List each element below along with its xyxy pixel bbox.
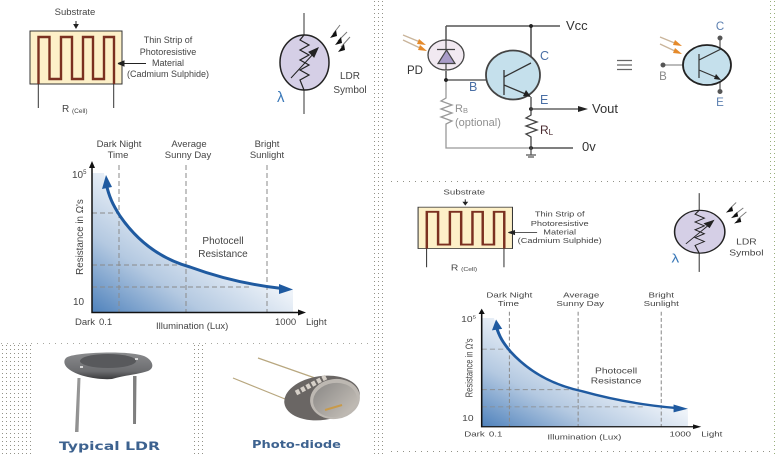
label: photoresistive material: Photoresistive — [531, 220, 589, 228]
LDR serpentine surface — [80, 354, 136, 368]
curve label: Resistance — [198, 249, 248, 260]
equivalence sign — [617, 60, 632, 70]
lambda: λ — [672, 252, 679, 265]
cell leads — [427, 249, 504, 267]
x axis labels: Dark — [464, 430, 486, 438]
x axis labels: Dark — [75, 317, 95, 328]
top condition labels: Average — [171, 139, 207, 150]
reference grid lines — [92, 165, 267, 312]
resistance curve — [106, 183, 282, 288]
symbol lead — [303, 13, 305, 114]
label: photoresistive material: Material — [152, 58, 184, 68]
label: photo-diode: Photo-diode — [252, 438, 341, 451]
photodiode body — [428, 40, 464, 70]
substrate diagram — [418, 188, 602, 273]
photodiode — [428, 39, 464, 70]
label: LDR symbol: Symbol — [729, 249, 763, 257]
arrow: Vout — [578, 106, 588, 112]
base lead — [664, 64, 699, 66]
label: cell resistance: (Cell) — [461, 268, 477, 273]
terminal labels: E — [716, 97, 724, 109]
photoresistive strip — [427, 212, 504, 249]
label: substrate: Substrate — [55, 7, 95, 18]
label: photoresistive material: Thin Strip of — [144, 35, 193, 45]
y axis title: Resistance in Ω's — [463, 338, 475, 397]
symbol arrowhead — [714, 74, 721, 80]
y axis ticks: 10 — [72, 170, 84, 181]
resistance curve — [496, 326, 677, 408]
junction dots — [444, 24, 533, 150]
label: PD: PD — [407, 65, 423, 77]
terminal labels: C — [716, 21, 724, 33]
top condition labels: Bright — [649, 291, 675, 299]
top condition labels: Time — [498, 299, 519, 308]
terminal dots — [661, 36, 723, 94]
symbol resistor — [695, 210, 704, 253]
light arrow heads — [726, 206, 741, 224]
substrate diagram — [30, 7, 209, 115]
LDR head — [64, 353, 152, 379]
diode triangle — [437, 39, 455, 70]
light arrow heads — [330, 30, 345, 52]
y axis title: Resistance in Ω's — [75, 199, 86, 275]
label: cell resistance: R — [62, 104, 69, 115]
top condition labels: Bright — [255, 139, 280, 150]
label: photoresistive material: Photoresistive — [140, 47, 196, 57]
symbol lead — [698, 193, 700, 272]
supply and output labels: 0v — [582, 139, 596, 154]
transistor — [486, 50, 540, 100]
label: RB: (optional) — [455, 117, 501, 129]
panel: LDR construction and response (top left) — [30, 7, 367, 332]
output and load — [526, 97, 579, 148]
chart: resistance vs illumination — [461, 291, 723, 441]
substrate rectangle — [418, 207, 512, 249]
curve label: Resistance — [591, 377, 641, 385]
x axis labels: 1000 — [669, 430, 691, 438]
label: RL: L — [549, 128, 554, 137]
panel: phototransistor circuit — [403, 18, 731, 157]
light arrows — [729, 202, 746, 220]
light arrows — [333, 25, 350, 47]
gradient area under curve — [482, 318, 688, 426]
photo: photo-diode — [233, 358, 363, 451]
light arrows — [660, 37, 677, 52]
base label: B — [659, 71, 667, 83]
base wire — [446, 79, 505, 81]
label: substrate: Substrate — [443, 188, 485, 196]
diode chip — [325, 405, 342, 410]
base resistor branch — [441, 80, 531, 148]
y axis ticks: 10 — [461, 315, 473, 324]
curve label: Photocell — [595, 366, 637, 375]
axes — [482, 312, 697, 427]
diode casing — [281, 371, 363, 425]
axis arrowheads — [479, 309, 701, 429]
top condition labels: Sunlight — [250, 150, 285, 161]
variable arrow — [686, 220, 714, 244]
top condition labels: Sunlight — [644, 299, 679, 308]
panel: component photos — [59, 353, 363, 453]
lambda: λ — [277, 89, 285, 106]
label: RB: B — [463, 106, 468, 115]
light arrow heads — [417, 39, 427, 51]
LDR symbol — [672, 193, 763, 272]
x axis labels: 0.1 — [489, 430, 503, 438]
diode leads — [233, 358, 315, 401]
emitter arrowhead — [523, 90, 531, 97]
chart: resistance vs illumination — [72, 139, 327, 332]
supply and output labels: Vcc — [566, 18, 588, 33]
LDR legs — [75, 376, 136, 432]
supply rail — [446, 25, 560, 27]
label: cell resistance: (Cell) — [72, 108, 88, 115]
axes — [92, 166, 302, 312]
circuit labels: B — [469, 80, 477, 94]
reference grid lines — [482, 312, 661, 426]
y axis ticks: 10 — [73, 297, 85, 308]
label: RL: R — [540, 123, 549, 137]
symbol resistor — [300, 35, 309, 90]
arrow: substrate pointer — [463, 199, 467, 205]
ground symbol — [526, 148, 536, 157]
x axis labels: Light — [306, 317, 327, 328]
x axis labels: 1000 — [275, 317, 296, 328]
top condition labels: Dark Night — [486, 291, 533, 299]
top condition labels: Average — [563, 291, 599, 299]
x axis labels: Illumination (Lux) — [547, 433, 622, 441]
symbol leads — [699, 49, 721, 78]
transistor body — [486, 50, 540, 100]
y axis ticks: 5 — [473, 315, 476, 320]
label: photoresistive material: (Cadmium Sulphide) — [518, 237, 602, 245]
arrow: substrate pointer — [74, 21, 78, 28]
panel: LDR construction and response (lower right copy) — [418, 188, 763, 441]
label: LDR symbol: LDR — [340, 71, 360, 82]
x axis labels: 0.1 — [99, 317, 112, 328]
diode lens rim — [307, 376, 363, 422]
top condition labels: Time — [108, 150, 128, 161]
LDR highlights — [80, 359, 138, 367]
LDR symbol — [277, 13, 367, 114]
diode rim markings — [296, 377, 326, 393]
symbol body — [280, 35, 329, 90]
light arrow heads — [673, 40, 682, 54]
label: cell resistance: R — [451, 264, 458, 272]
equivalent transistor symbol — [659, 21, 731, 109]
transistor leads — [504, 63, 531, 95]
label: photoresistive material: Thin Strip of — [535, 211, 585, 218]
label: typical LDR: Typical LDR — [59, 439, 160, 453]
curve label: Photocell — [202, 236, 244, 247]
arrow: material pointer — [508, 231, 537, 234]
supply and output labels: Vout — [592, 101, 618, 116]
circuit labels: C — [540, 49, 549, 63]
photo: typical LDR — [59, 353, 160, 453]
circuit labels: E — [540, 93, 548, 107]
label: LDR symbol: LDR — [736, 238, 757, 246]
gradient area under curve — [92, 173, 293, 312]
top condition labels: Dark Night — [97, 139, 142, 150]
substrate rectangle — [30, 31, 122, 84]
symbol body — [683, 45, 731, 85]
curve arrowheads — [102, 175, 293, 294]
light arrows — [403, 35, 420, 48]
cell leads — [38, 84, 114, 108]
collector and emitter terminals — [719, 38, 721, 91]
ground rail — [531, 147, 573, 149]
x axis labels: Illumination (Lux) — [156, 321, 228, 332]
y axis ticks: 5 — [83, 170, 87, 176]
arrow: material pointer — [118, 61, 146, 66]
x axis labels: Light — [701, 430, 723, 438]
diode lens — [311, 380, 359, 420]
top condition labels: Sunny Day — [556, 299, 605, 308]
y axis ticks: 10 — [462, 414, 474, 423]
axis arrowheads — [89, 161, 306, 316]
collector wire — [530, 26, 532, 63]
label: photoresistive material: (Cadmium Sulphide) — [127, 69, 209, 79]
variable arrow — [291, 48, 318, 78]
symbol body — [675, 210, 725, 253]
top condition labels: Sunny Day — [165, 150, 211, 161]
photoresistive strip — [38, 37, 114, 84]
curve arrowheads — [492, 320, 688, 412]
label: photoresistive material: Material — [543, 228, 576, 236]
label: LDR symbol: Symbol — [333, 85, 367, 96]
photodiode wire — [445, 26, 447, 80]
label: RB: R — [455, 103, 468, 115]
